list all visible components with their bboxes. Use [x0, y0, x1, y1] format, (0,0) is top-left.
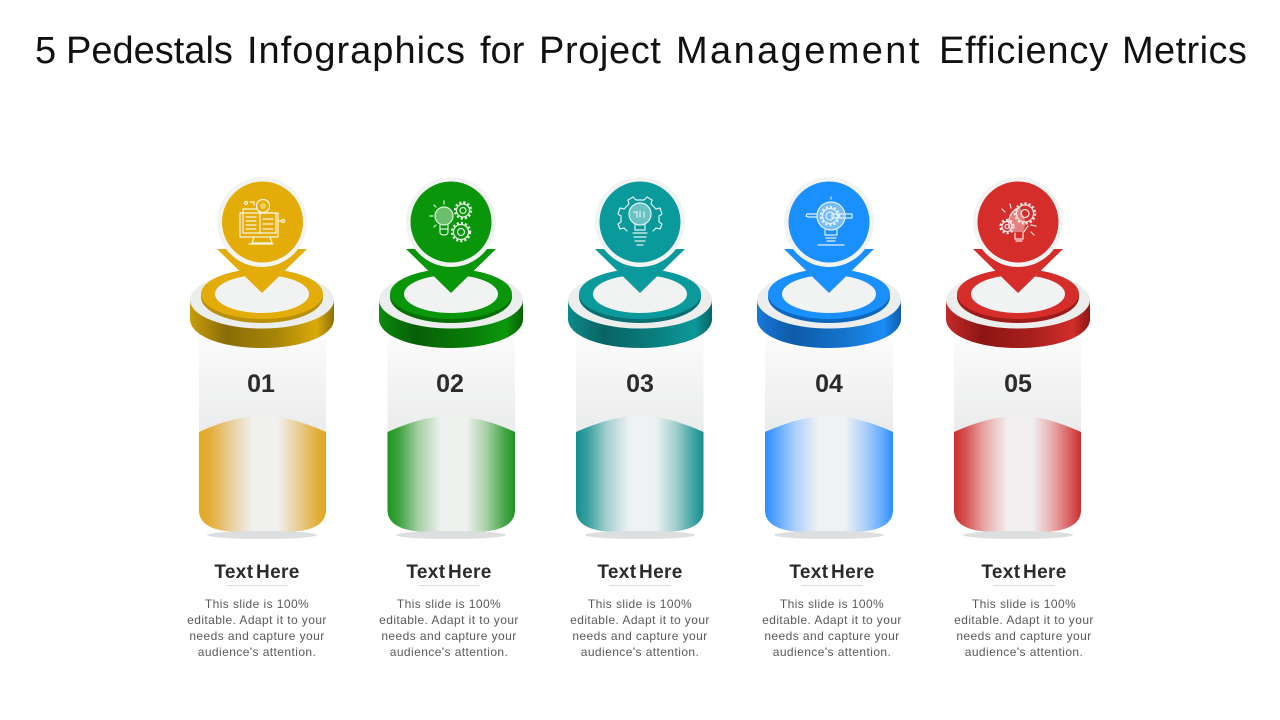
- pointer arrow: [595, 249, 685, 293]
- description: editable. Adapt it to your: [762, 613, 902, 627]
- description: This slide is 100%: [205, 597, 309, 611]
- description: needs and capture your: [764, 629, 900, 643]
- base shadow: [774, 531, 884, 539]
- icon: bulb and gears: [430, 201, 471, 241]
- title: Pedestals: [66, 30, 233, 72]
- pedestal 3: [568, 177, 712, 659]
- coloured base: [388, 416, 515, 534]
- pedestal 5: [946, 177, 1094, 659]
- description: audience's attention.: [965, 645, 1083, 659]
- description: needs and capture your: [381, 629, 517, 643]
- description: needs and capture your: [189, 629, 325, 643]
- pedestal 2: [379, 177, 523, 659]
- description: audience's attention.: [390, 645, 508, 659]
- icon badge: [595, 177, 685, 267]
- divider: [993, 584, 1055, 586]
- disc: [190, 269, 334, 348]
- heading: Text Here: [789, 562, 875, 583]
- icon: monitor with book and pin: [240, 200, 284, 244]
- coloured base: [765, 416, 893, 534]
- icon: bulb with gears: [1000, 204, 1036, 241]
- column: [954, 330, 1081, 440]
- column: [765, 330, 893, 440]
- description: This slide is 100%: [780, 597, 884, 611]
- description: audience's attention.: [773, 645, 891, 659]
- pointer arrow: [973, 249, 1063, 293]
- disc: [379, 269, 523, 348]
- divider: [801, 584, 863, 586]
- base shadow: [963, 531, 1073, 539]
- column: [576, 330, 704, 440]
- heading: Text Here: [214, 562, 300, 583]
- divider: [418, 584, 480, 586]
- title: Management: [676, 30, 922, 72]
- description: audience's attention.: [581, 645, 699, 659]
- pointer arrow: [217, 249, 307, 293]
- icon badge: [784, 177, 874, 267]
- description: needs and capture your: [956, 629, 1092, 643]
- description: editable. Adapt it to your: [379, 613, 519, 627]
- divider: [609, 584, 671, 586]
- title: Metrics: [1122, 30, 1247, 72]
- pointer arrow: [406, 249, 496, 293]
- base shadow: [207, 531, 317, 539]
- coloured base: [954, 416, 1081, 534]
- description: This slide is 100%: [588, 597, 692, 611]
- number: 03: [626, 370, 654, 398]
- column: [388, 330, 515, 440]
- disc: [757, 269, 901, 348]
- disc: [946, 269, 1090, 348]
- coloured base: [576, 416, 704, 534]
- title: Infographics: [247, 30, 466, 72]
- number: 04: [815, 370, 843, 398]
- number: 01: [247, 370, 275, 398]
- number: 02: [436, 370, 464, 398]
- description: audience's attention.: [198, 645, 316, 659]
- heading: Text Here: [406, 562, 492, 583]
- column: [199, 330, 326, 440]
- number: 05: [1004, 370, 1032, 398]
- pointer arrow: [784, 249, 874, 293]
- description: needs and capture your: [572, 629, 708, 643]
- title: Project: [539, 30, 661, 72]
- description: This slide is 100%: [972, 597, 1076, 611]
- base shadow: [585, 531, 695, 539]
- title: 5: [35, 30, 56, 72]
- heading: Text Here: [597, 562, 683, 583]
- description: editable. Adapt it to your: [954, 613, 1094, 627]
- pedestal 4: [757, 177, 902, 659]
- icon: bulb with gear: [618, 197, 662, 245]
- pedestal 1: [187, 177, 334, 659]
- description: editable. Adapt it to your: [570, 613, 710, 627]
- icon badge: [406, 177, 496, 267]
- coloured base: [199, 416, 326, 534]
- title: for: [480, 30, 525, 72]
- base shadow: [396, 531, 506, 539]
- disc: [568, 269, 712, 348]
- description: This slide is 100%: [397, 597, 501, 611]
- icon: bulb with gear and pencil: [806, 197, 852, 245]
- icon badge: [973, 177, 1063, 267]
- title: Efficiency: [939, 30, 1109, 72]
- icon badge: [217, 177, 307, 267]
- description: editable. Adapt it to your: [187, 613, 327, 627]
- divider: [226, 584, 288, 586]
- heading: Text Here: [981, 562, 1067, 583]
